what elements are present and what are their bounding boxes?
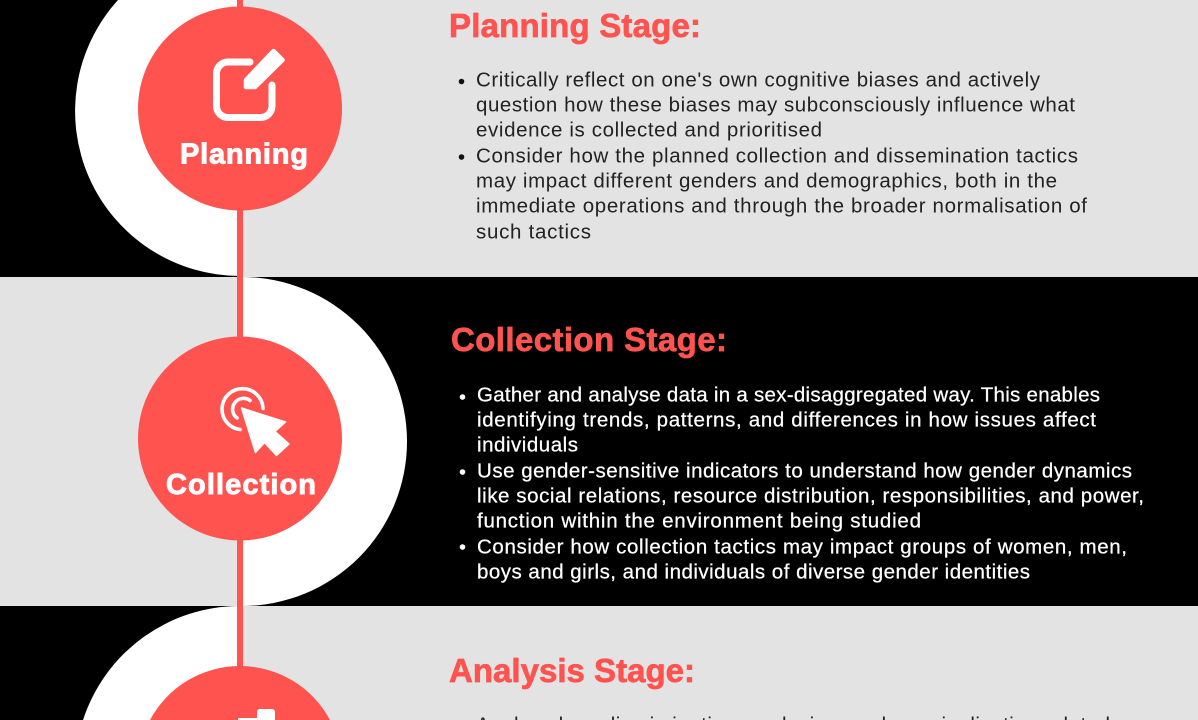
badge label: Collection: Collection xyxy=(166,469,316,501)
text block: planning stage xyxy=(449,7,1087,244)
bullet list: collection: like social relations, resource distribution, responsibilities, and power, xyxy=(477,484,1144,508)
bullet list: planning xyxy=(459,68,1087,244)
bullet list: planning: such tactics xyxy=(476,220,591,244)
panel: collection background xyxy=(0,277,1198,606)
bullet list: planning: question how these biases may subconsciously influence what xyxy=(476,94,1075,116)
badge label: Planning: Planning xyxy=(180,138,308,170)
text block: analysis stage xyxy=(449,652,1110,720)
bullet list: planning: evidence is collected and prioritised xyxy=(476,118,822,142)
heading: Collection Stage: Collection Stage: xyxy=(451,321,727,358)
panel: analysis background xyxy=(0,606,1198,720)
timeline connector line xyxy=(237,0,243,720)
bullet list: planning: immediate operations and through the broader normalisation of xyxy=(476,194,1087,218)
bullet list: collection xyxy=(460,384,1144,584)
bullet list: collection: boys and girls, and individuals of diverse gender identities xyxy=(477,560,1030,584)
heading: Analysis Stage: Analysis Stage: xyxy=(449,652,695,689)
bullet list: planning: may impact different genders and demographics, both in the xyxy=(476,170,1057,192)
collection badge xyxy=(138,336,342,540)
planning badge xyxy=(138,6,342,210)
bullet list: collection: individuals xyxy=(477,434,578,456)
bullet list: planning: Consider how the planned collection and dissemination tactics xyxy=(476,144,1078,168)
bullet list: collection: Use gender-sensitive indicators to understand how gender dynamics xyxy=(477,460,1132,482)
text block: collection stage xyxy=(451,321,1144,584)
bullet list: collection: identifying trends, patterns, and differences in how issues affect xyxy=(477,408,1096,432)
bullet list: collection: Consider how collection tactics may impact groups of women, men, xyxy=(477,536,1127,558)
panel: planning background xyxy=(0,0,1198,277)
bullet list: collection: function within the environment being studied xyxy=(477,510,921,532)
bullet list: collection: Gather and analyse data in a sex-disaggregated way. This enables xyxy=(477,384,1100,406)
icon: analysis bars xyxy=(238,709,275,720)
analysis badge xyxy=(150,666,330,720)
heading: Planning Stage: Planning Stage: xyxy=(449,7,701,44)
icon: edit note with pencil xyxy=(216,51,282,118)
icon: cursor click xyxy=(222,389,289,456)
bullet list: planning: Critically reflect on one's own cognitive biases and actively xyxy=(476,68,1041,92)
